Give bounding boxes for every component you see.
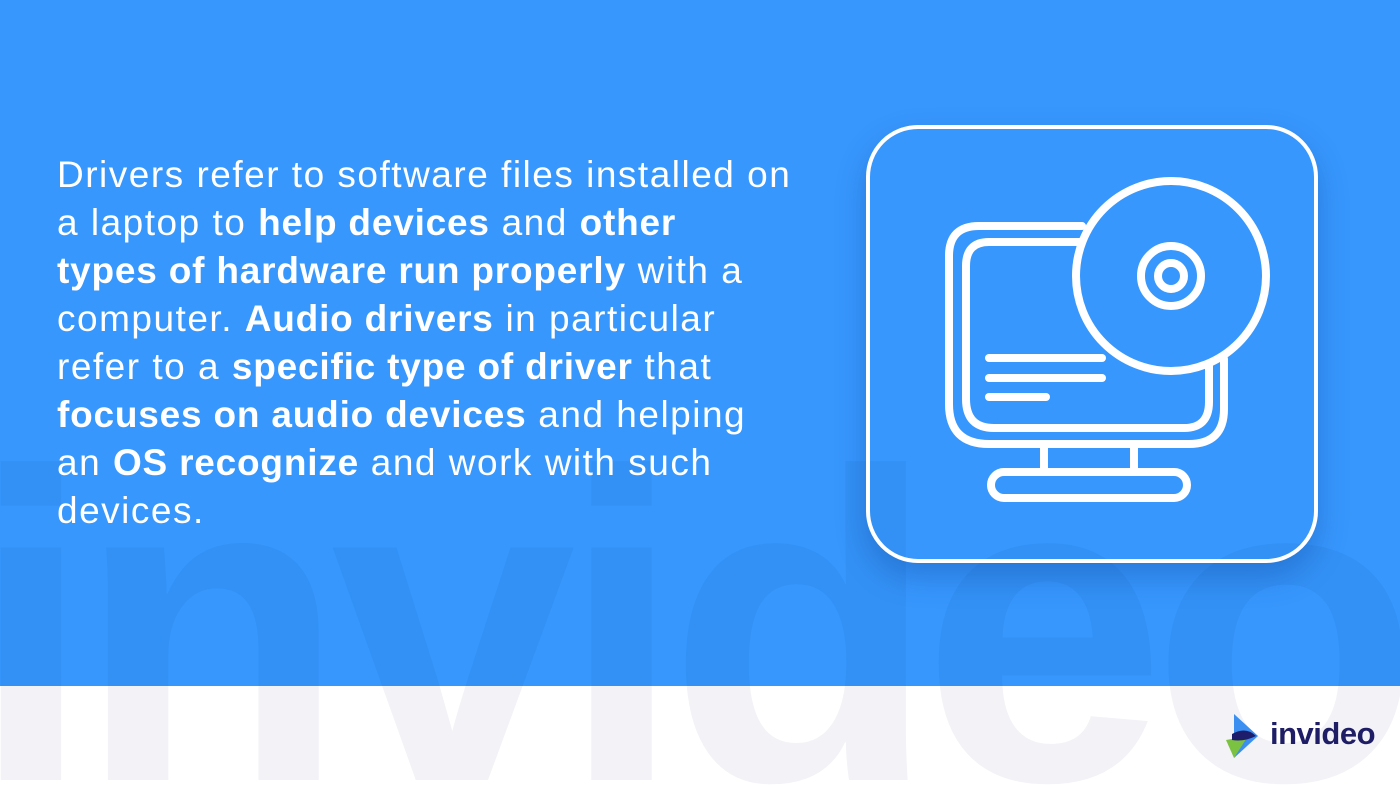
logo text: invideo (1270, 716, 1375, 751)
icon: logo mark (1226, 714, 1258, 758)
text block: description: devices. (57, 490, 205, 531)
text block: description: types of hardware run properly with a (57, 250, 743, 291)
text block: description: an OS recognize and work with such (57, 442, 712, 483)
logo: invideo (1226, 714, 1375, 758)
watermark: invideo (1, 686, 1400, 784)
icon: monitor with disc (945, 177, 1270, 502)
text block: description (57, 154, 791, 531)
text block: description: refer to a specific type of driver that (57, 346, 712, 387)
text block: description: a laptop to help devices and other (57, 202, 676, 243)
text block: description: computer. Audio drivers in particular (57, 298, 716, 339)
panel: icon box (866, 125, 1318, 563)
text block: description: focuses on audio devices and helping (57, 394, 746, 435)
text block: description: Drivers refer to software files installed on (57, 154, 791, 195)
